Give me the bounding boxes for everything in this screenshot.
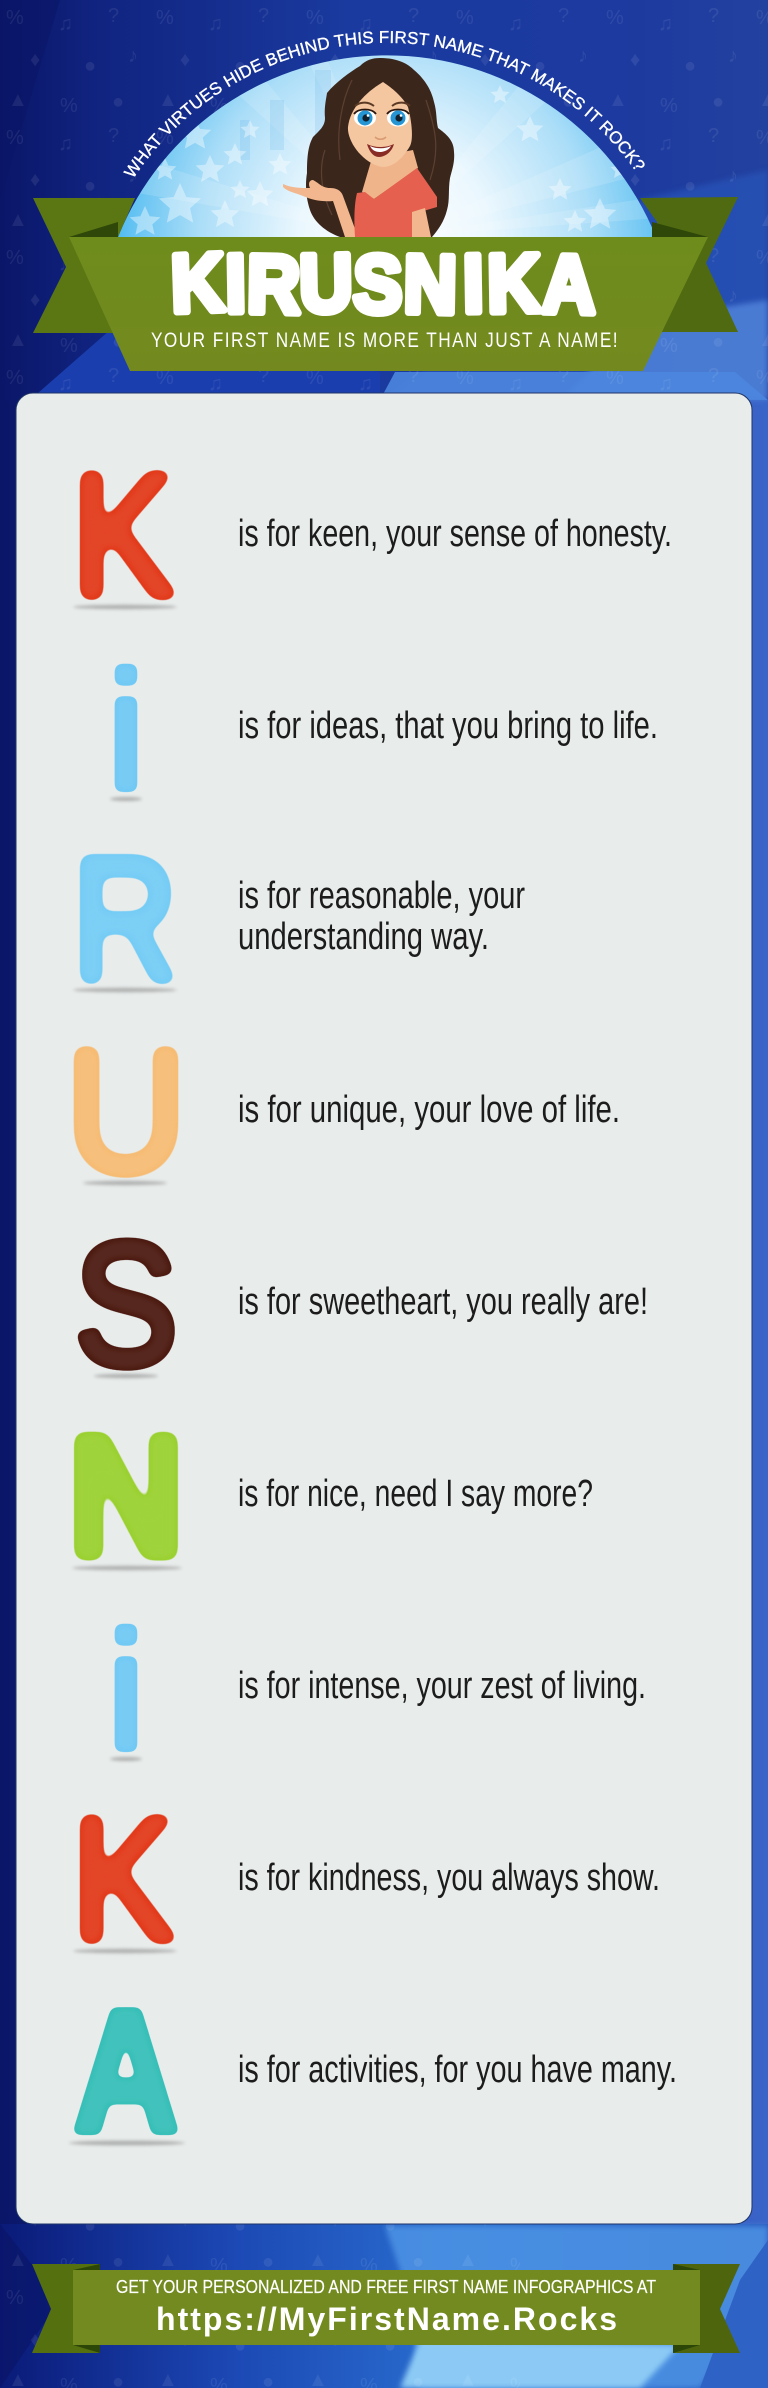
shadow <box>73 1949 177 1953</box>
footer line: GET YOUR PERSONALIZED AND FREE FIRST NAME INFOGRAPHICS AT <box>116 2276 656 2297</box>
shirt <box>354 168 437 237</box>
footer url: https://MyFirstName.Rocks <box>156 2301 617 2337</box>
text: is for intense, your zest of living. <box>238 1665 646 1707</box>
letter K: K <box>72 437 174 632</box>
row: R <box>72 821 525 1016</box>
letter N: N <box>68 1398 184 1593</box>
row: N <box>68 1398 593 1593</box>
shadow <box>69 2141 185 2145</box>
text: understanding way. <box>238 916 489 958</box>
arm and hand <box>283 180 358 237</box>
row: S <box>74 1206 648 1401</box>
nose <box>375 137 386 139</box>
name heading: KIRUSNIKA <box>170 235 596 331</box>
row: i (second) <box>108 1599 646 1784</box>
letter R: R <box>72 821 178 1016</box>
footer ribbon <box>32 2264 740 2353</box>
ribbon folds <box>73 2264 100 2270</box>
letter K: K <box>72 1781 174 1976</box>
curved tagline: WHAT VIRTUES HIDE BEHIND THIS FIRST NAME THAT MAKES IT ROCK? <box>123 30 645 176</box>
row: K <box>72 437 672 632</box>
mouth <box>367 144 394 157</box>
row: K (second) <box>72 1781 660 1976</box>
face <box>348 82 412 167</box>
ribbon main <box>69 237 708 371</box>
letter A: A <box>73 1973 179 2168</box>
hair <box>306 58 454 237</box>
letter U: U <box>66 1013 186 1208</box>
letter i: i <box>108 1599 144 1784</box>
shadow <box>110 1757 142 1761</box>
neck <box>362 150 418 199</box>
row: U <box>66 1013 620 1208</box>
right arm <box>412 208 431 237</box>
row: A <box>69 1973 677 2168</box>
title ribbon <box>33 197 738 371</box>
text: is for reasonable, your <box>238 875 525 917</box>
letter i: i <box>108 639 144 824</box>
ribbon tails <box>33 198 135 333</box>
letter S: S <box>74 1206 178 1401</box>
ribbon folds <box>69 222 118 237</box>
subtitle: YOUR FIRST NAME IS MORE THAN JUST A NAME! <box>151 328 619 352</box>
illustration: woman character <box>283 58 454 237</box>
shadow <box>73 605 177 609</box>
text: is for sweetheart, you really are! <box>238 1281 648 1323</box>
ribbon tails <box>32 2264 100 2353</box>
text: is for unique, your love of life. <box>238 1089 620 1131</box>
row: i <box>108 639 658 824</box>
shadow <box>110 797 142 801</box>
eyes <box>354 110 376 126</box>
panel <box>16 393 752 2224</box>
eyebrows <box>355 103 410 106</box>
text: is for nice, need I say more? <box>238 1473 593 1515</box>
dome with stars and rays <box>118 55 652 237</box>
shadow <box>83 1181 167 1185</box>
shadow <box>73 988 177 992</box>
ribbon main <box>73 2270 700 2345</box>
shadow <box>94 1374 158 1378</box>
shadow <box>72 1566 182 1570</box>
